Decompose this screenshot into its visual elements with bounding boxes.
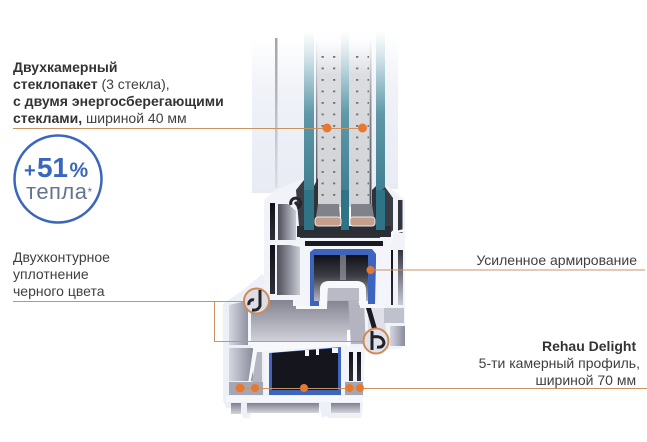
badge: +51% warmth: + [24, 160, 36, 182]
badge: +51% warmth: 51 [37, 152, 68, 183]
icon: spacer bars [315, 204, 375, 226]
upper left chambers [270, 203, 275, 240]
text: double-chamber glazing unit: стеклопакет (3 стекла), [13, 76, 170, 92]
text: double-contour seal: уплотнение [13, 266, 89, 282]
badge: +51% warmth [14, 136, 102, 222]
text: double-chamber glazing unit: стеклами, шириной 40 мм [13, 110, 187, 126]
badge: +51% warmth: * [88, 185, 92, 199]
text: double-chamber glazing unit: Двухкамерный [13, 59, 117, 75]
upper right chambers [398, 200, 402, 233]
orange markers [236, 124, 374, 392]
text: double-chamber glazing unit [13, 59, 224, 126]
big chamber [250, 298, 350, 343]
glazing unit: frame backing and triple glass [252, 30, 398, 230]
leader lines [13, 128, 647, 388]
reinforcement chamber [290, 238, 391, 306]
gasket callout: lower [364, 328, 388, 354]
badge: +51% warmth: % [70, 159, 88, 182]
icon: upper gasket [291, 198, 301, 208]
lower chamber with blue reinforcement [264, 345, 347, 394]
text: double-contour seal [13, 249, 110, 299]
black seal channel [366, 308, 378, 332]
sash profile: upper white body with chambers [264, 178, 405, 349]
text: double-chamber glazing unit: с двумя энергосберегающими [13, 93, 224, 109]
frame profile: lower white body [223, 274, 366, 418]
text: reinforced armoring: Усиленное армирование [476, 252, 637, 268]
badge: +51% warmth: тепла [26, 179, 88, 204]
text: Rehau Delight profile: 5-ти камерный профиль, [479, 355, 640, 371]
text: Rehau Delight profile [479, 338, 640, 388]
text: Rehau Delight profile: Rehau Delight [542, 338, 636, 354]
text: double-contour seal: черного цвета [13, 283, 105, 299]
gasket callout: upper [244, 288, 269, 314]
text: double-contour seal: Двухконтурное [13, 249, 110, 265]
glazing bead, dark wedges [296, 180, 393, 238]
hook on the right [388, 230, 405, 244]
text: Rehau Delight profile: шириной 70 мм [536, 372, 636, 388]
